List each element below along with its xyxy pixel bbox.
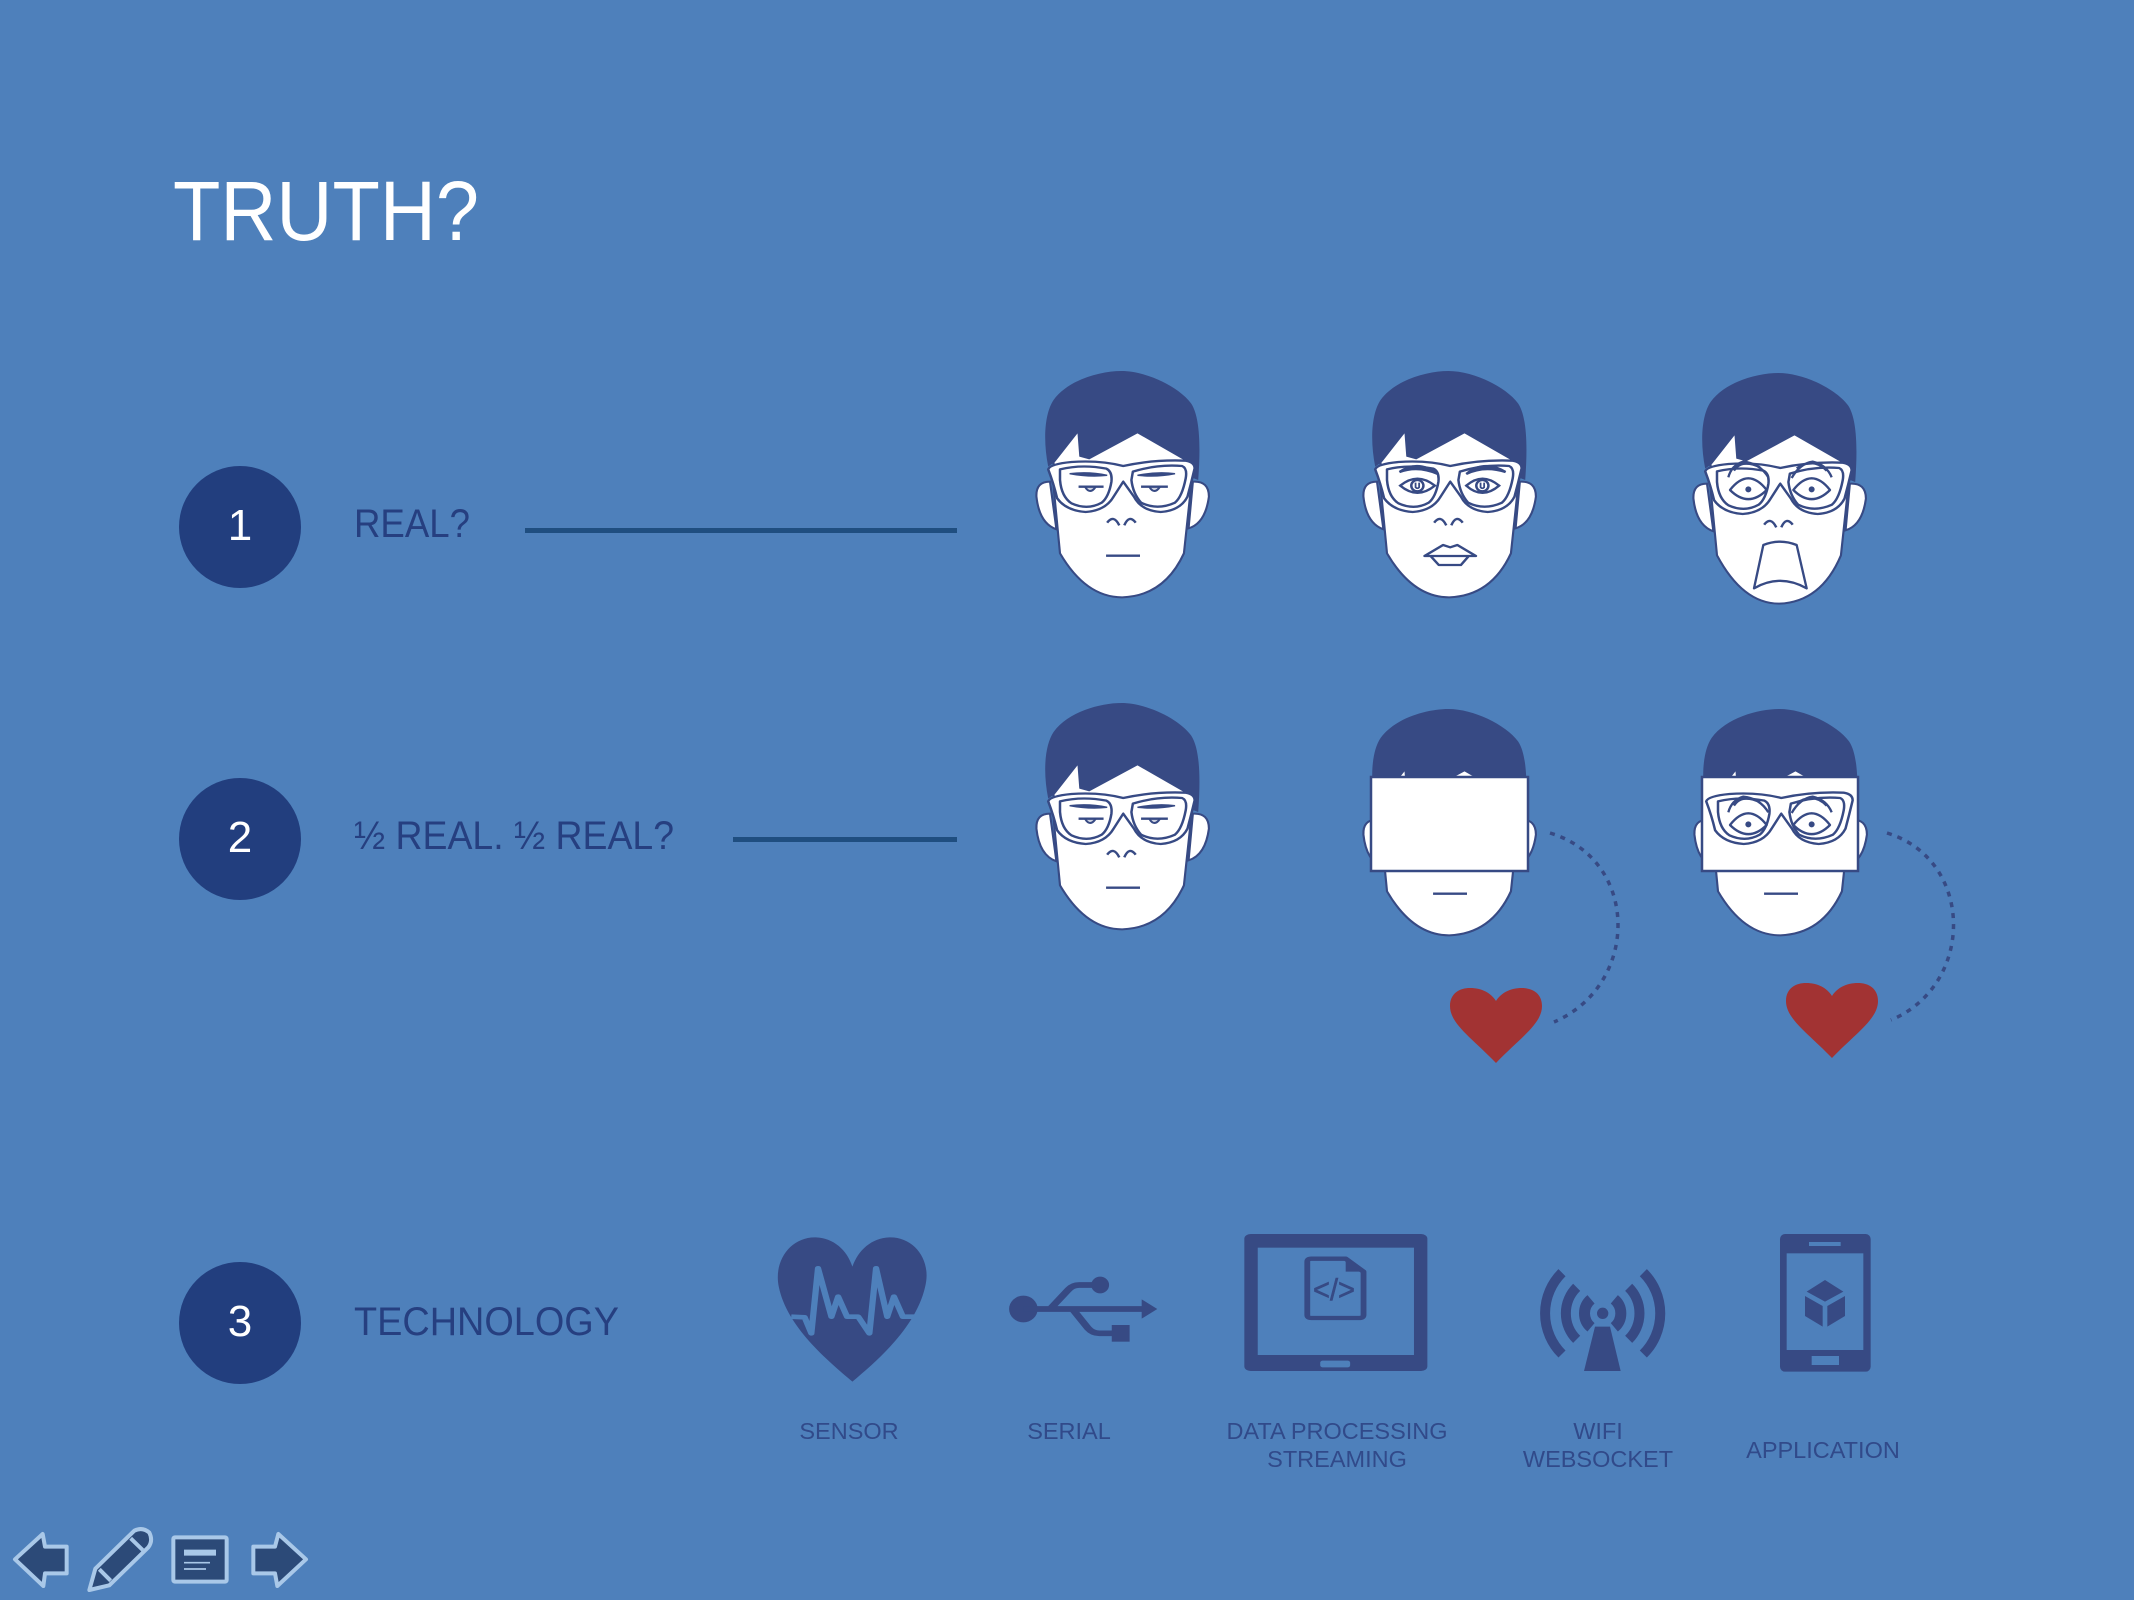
face: surprised with lips — [1363, 371, 1536, 597]
code glyph: </> — [1313, 1272, 1355, 1307]
label: half real: ½ REAL. ½ REAL? — [354, 814, 674, 858]
blank card — [1371, 777, 1528, 871]
caption: data processing streaming: DATA PROCESSING — [1226, 1418, 1448, 1444]
number badge 1: 1 — [228, 501, 252, 550]
red heart 1 — [1450, 988, 1542, 1063]
number badge 3 — [179, 1262, 301, 1384]
icon: usb serial — [1009, 1277, 1157, 1342]
red heart 2 — [1786, 983, 1878, 1058]
connector line 1 — [525, 528, 957, 533]
icon: wifi antenna — [1545, 1273, 1660, 1371]
caption: data processing streaming: STREAMING — [1267, 1446, 1407, 1472]
glasses and wide eyes — [1706, 792, 1853, 844]
navigation toolbar — [15, 1529, 306, 1590]
icon: phone with cube — [1780, 1234, 1871, 1372]
number badge 3: 3 — [228, 1297, 252, 1346]
eyes and brows — [1399, 466, 1506, 493]
number badge 2 — [179, 778, 301, 900]
title: TRUTH? — [173, 164, 479, 258]
row 2: half real — [179, 703, 1954, 1063]
number badge 1 — [179, 466, 301, 588]
caption: wifi websocket: WEBSOCKET — [1523, 1446, 1673, 1472]
face: card showing eyes — [1694, 709, 1867, 935]
label: real: REAL? — [354, 502, 470, 546]
dotted arc 1 — [1550, 833, 1618, 1022]
nav: forward arrow — [253, 1534, 306, 1586]
nav: notes — [173, 1537, 227, 1582]
lips — [1424, 545, 1476, 565]
card with glasses — [1702, 777, 1858, 871]
icon: tablet with code — [1244, 1234, 1427, 1371]
dotted arc 2 — [1887, 833, 1954, 1020]
connector line 2 — [733, 837, 957, 842]
nav: back arrow — [15, 1534, 67, 1586]
label: technology: TECHNOLOGY — [354, 1300, 619, 1344]
icon: heart sensor — [778, 1237, 927, 1382]
face: neutral second row — [1036, 703, 1209, 929]
row 3: technology — [179, 1234, 1900, 1472]
caption: sensor: SENSOR — [799, 1418, 899, 1444]
face: neutral — [1036, 371, 1209, 597]
caption: application: APPLICATION — [1746, 1437, 1900, 1463]
shocked eyes and mouth — [1728, 462, 1832, 588]
caption: serial: SERIAL — [1027, 1418, 1111, 1444]
face: covered by blank card — [1363, 709, 1536, 935]
nav: pencil — [89, 1529, 151, 1590]
face: shocked — [1693, 373, 1866, 604]
number badge 2: 2 — [228, 813, 252, 862]
row 1: real — [179, 371, 1866, 604]
caption: wifi websocket: WIFI — [1573, 1418, 1623, 1444]
